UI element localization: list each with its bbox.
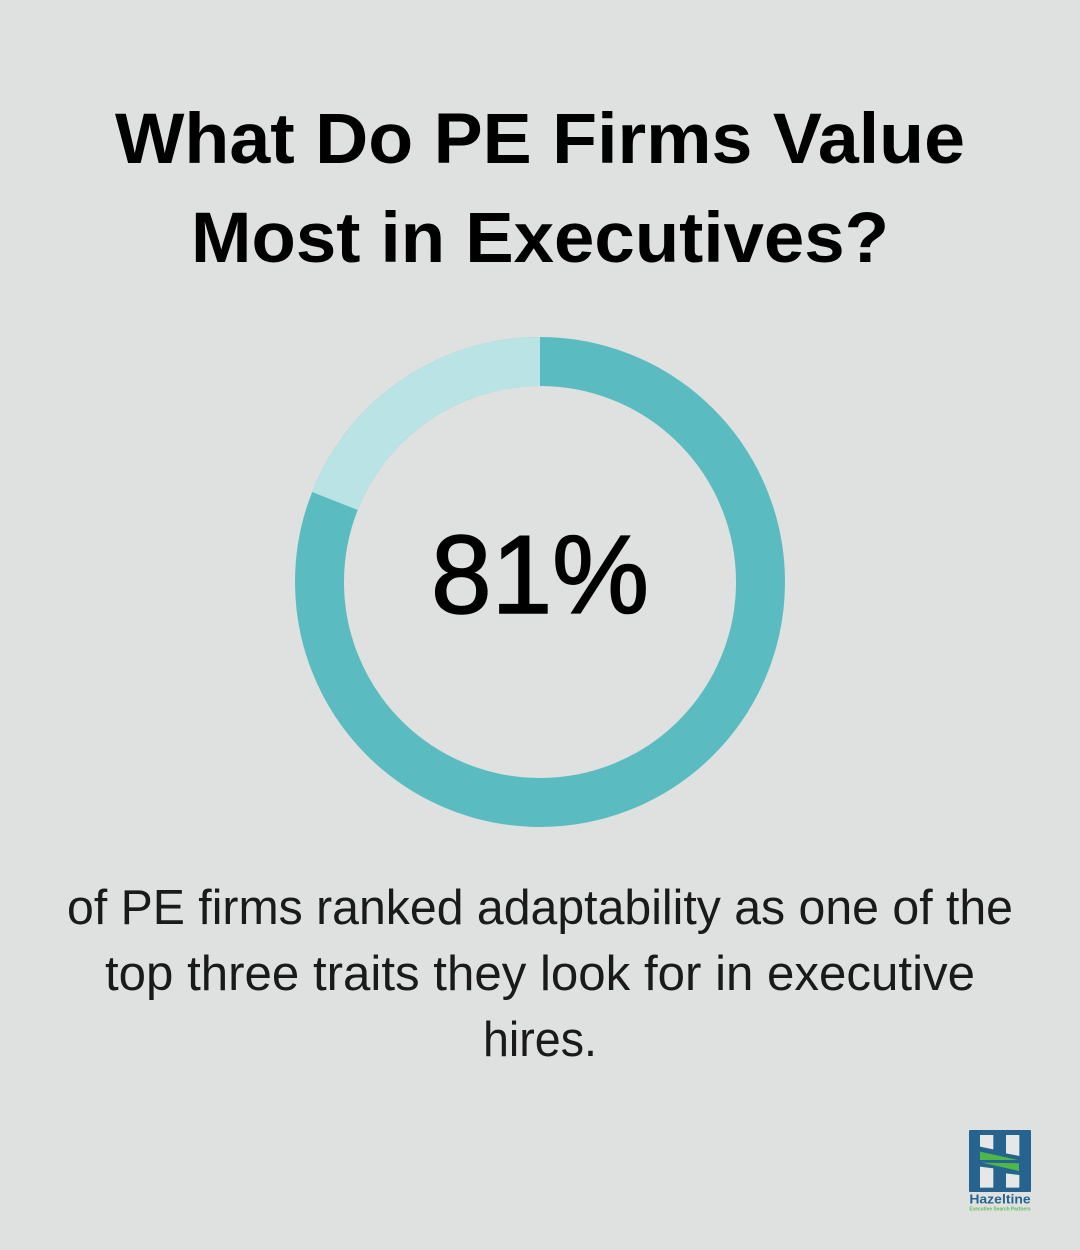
description text: top three traits they look for in executive — [105, 947, 975, 1001]
description text — [67, 881, 1013, 1067]
logo: Hazeltine: Executive Search Partners — [969, 1206, 1031, 1212]
statistic: 81%: 81% — [431, 513, 649, 637]
title — [115, 100, 965, 278]
description text: hires. — [483, 1013, 597, 1067]
description text: of PE firms ranked adaptability as one of the — [67, 881, 1013, 935]
logo: Hazeltine — [969, 1130, 1031, 1212]
title: Most in Executives? — [191, 199, 889, 278]
title: What Do PE Firms Value — [115, 100, 965, 179]
donut chart: 81% — [320, 362, 760, 802]
logo: Hazeltine: Hazeltine — [969, 1191, 1031, 1206]
